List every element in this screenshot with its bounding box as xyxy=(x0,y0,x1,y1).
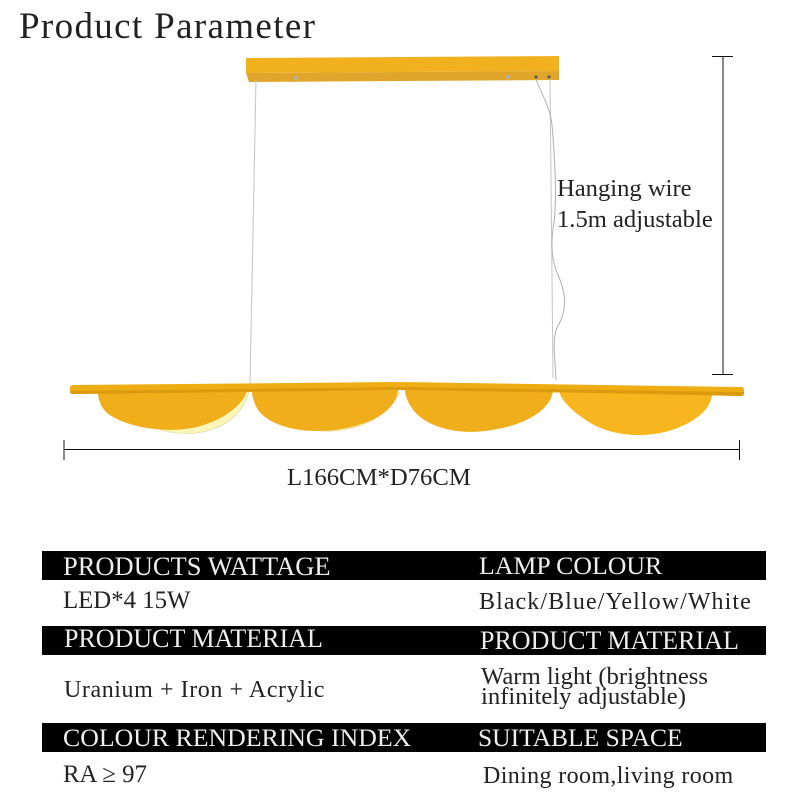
height dimension line xyxy=(712,56,733,374)
value: light xyxy=(481,663,708,710)
width dimension line xyxy=(64,440,740,460)
value: light: infinitely adjustable) xyxy=(481,683,686,710)
header row 3 xyxy=(42,723,766,752)
header row 2: PRODUCT MATERIAL xyxy=(480,626,739,655)
header row 2: PRODUCT MATERIAL xyxy=(64,624,323,653)
hanging wire label: 1.5m adjustable xyxy=(557,206,713,232)
header row 2 xyxy=(42,626,766,655)
header row 1 xyxy=(42,551,766,580)
horizontal bar xyxy=(70,382,744,396)
value: space: Dining room,living room xyxy=(483,763,734,789)
size label: L166CM*D76CM xyxy=(287,464,471,491)
lamp shades xyxy=(98,390,712,435)
hanging wire label: Hanging wire xyxy=(557,175,692,202)
hanging wires xyxy=(250,78,565,384)
value: colour: Black/Blue/Yellow/White xyxy=(479,589,752,615)
hanging wire label xyxy=(557,175,713,232)
ceiling canopy xyxy=(246,56,559,82)
value: wattage: LED*4 15W xyxy=(63,587,190,614)
header row 1: PRODUCTS WATTAGE xyxy=(63,551,331,581)
title: Product Parameter xyxy=(19,6,316,47)
value: light: Warm light (brightness xyxy=(481,663,708,690)
header row 3: COLOUR RENDERING INDEX xyxy=(63,723,411,752)
value: RA: RA ≥ 97 xyxy=(63,761,147,788)
lamp illustration xyxy=(64,56,744,460)
value: material: Uranium + Iron + Acrylic xyxy=(64,677,325,703)
header row 1: LAMP COLOUR xyxy=(479,551,662,580)
header row 3: SUITABLE SPACE xyxy=(478,723,683,752)
glowing diffuser edges xyxy=(160,392,400,433)
